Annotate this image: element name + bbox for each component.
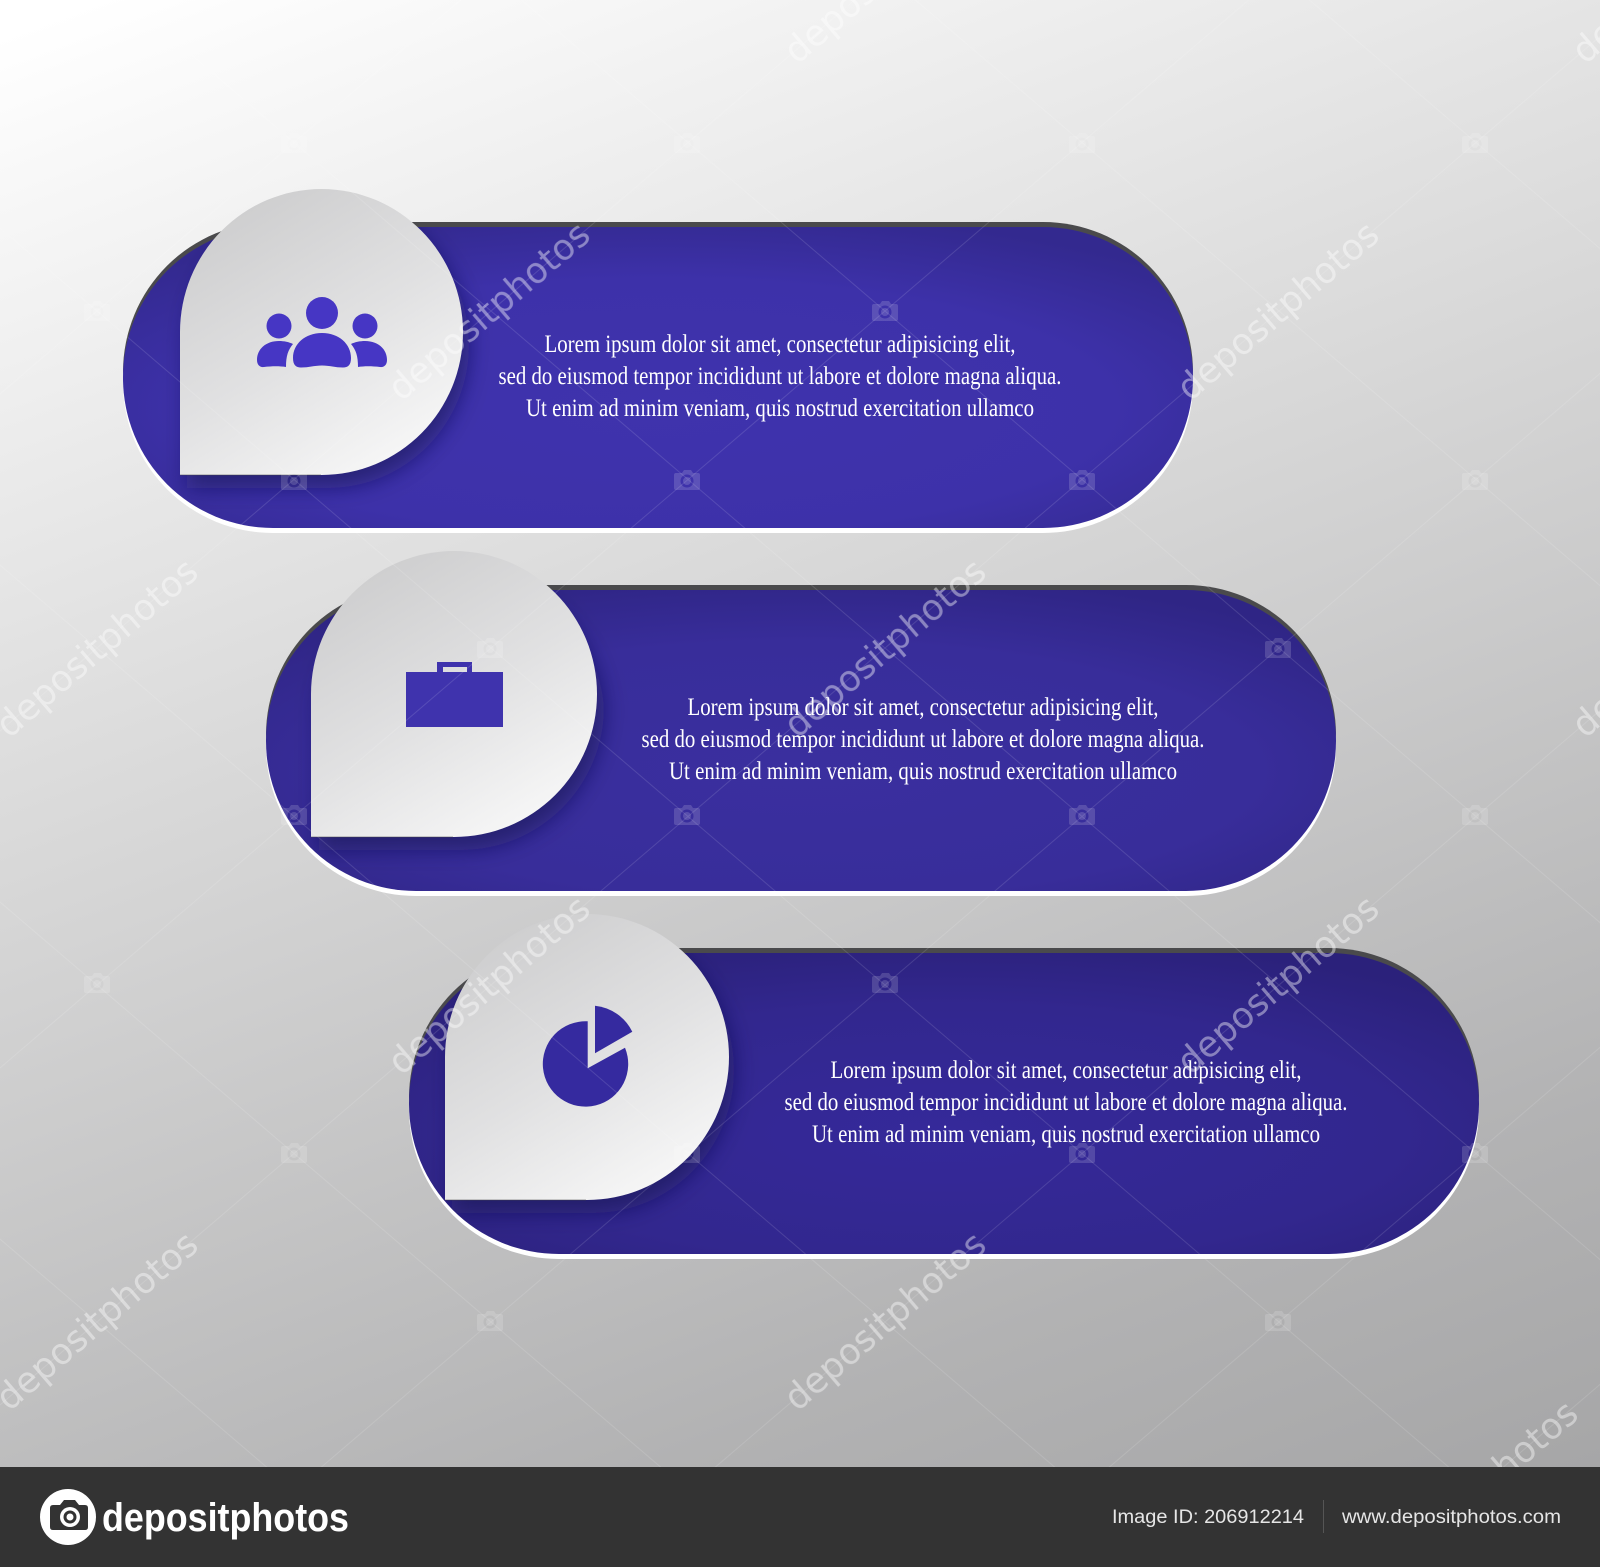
- icon: briefcase: [406, 662, 503, 727]
- footer bar: [0, 1467, 1600, 1567]
- banner 3 text: [784, 1057, 1348, 1148]
- banner 1 text: Lorem ipsum dolor sit amet, consectetur adipisicing elit,: [544, 331, 1016, 358]
- banner 1 text: Ut enim ad minim veniam, quis nostrud exercitation ullamco: [526, 395, 1034, 422]
- logo camera icon: [40, 1489, 96, 1545]
- banner 1 pill: [123, 222, 1193, 533]
- banner 2 text: Ut enim ad minim veniam, quis nostrud exercitation ullamco: [669, 758, 1177, 785]
- banner 2 pill: [266, 576, 1336, 896]
- banner 2 drop badge: [311, 551, 597, 837]
- banner 3 text: sed do eiusmod tempor incididunt ut labore et dolore magna aliqua.: [784, 1089, 1348, 1116]
- watermark overlay: depositphotos: [1169, 888, 1387, 1083]
- banner 1 text: sed do eiusmod tempor incididunt ut labore et dolore magna aliqua.: [498, 363, 1062, 390]
- panel: banner 1: [123, 189, 1193, 533]
- banner 2 text: sed do eiusmod tempor incididunt ut labore et dolore magna aliqua.: [642, 726, 1204, 753]
- banner 3 text: Lorem ipsum dolor sit amet, consectetur adipisicing elit,: [830, 1057, 1302, 1084]
- banner 2 text: [642, 694, 1204, 785]
- watermark overlay: depositphotos: [776, 1224, 994, 1419]
- panel: banner 3: [409, 914, 1479, 1259]
- banner 3 pill: [409, 927, 1479, 1259]
- icon: pie chart: [543, 1006, 632, 1107]
- watermark overlay: depositphotos: [776, 551, 994, 746]
- banner 1 text: [498, 331, 1062, 422]
- logo wordmark: depositphotos: [102, 1496, 349, 1540]
- watermark overlay: depositphotos: [1169, 214, 1387, 409]
- icon: people: [257, 297, 387, 368]
- image id: Image ID: 206912214: [1112, 1507, 1304, 1528]
- banner 3 drop badge: [445, 914, 729, 1200]
- watermark overlay: depositphotos: [380, 888, 598, 1083]
- panel: banner 2: [266, 551, 1336, 896]
- watermark overlay: depositphotos: [380, 214, 598, 409]
- banner 2 text: Lorem ipsum dolor sit amet, consectetur adipisicing elit,: [688, 694, 1158, 721]
- website url: www.depositphotos.com: [1341, 1507, 1561, 1528]
- banner 1 drop badge: [180, 189, 463, 475]
- banner 3 text: Ut enim ad minim veniam, quis nostrud exercitation ullamco: [812, 1121, 1320, 1148]
